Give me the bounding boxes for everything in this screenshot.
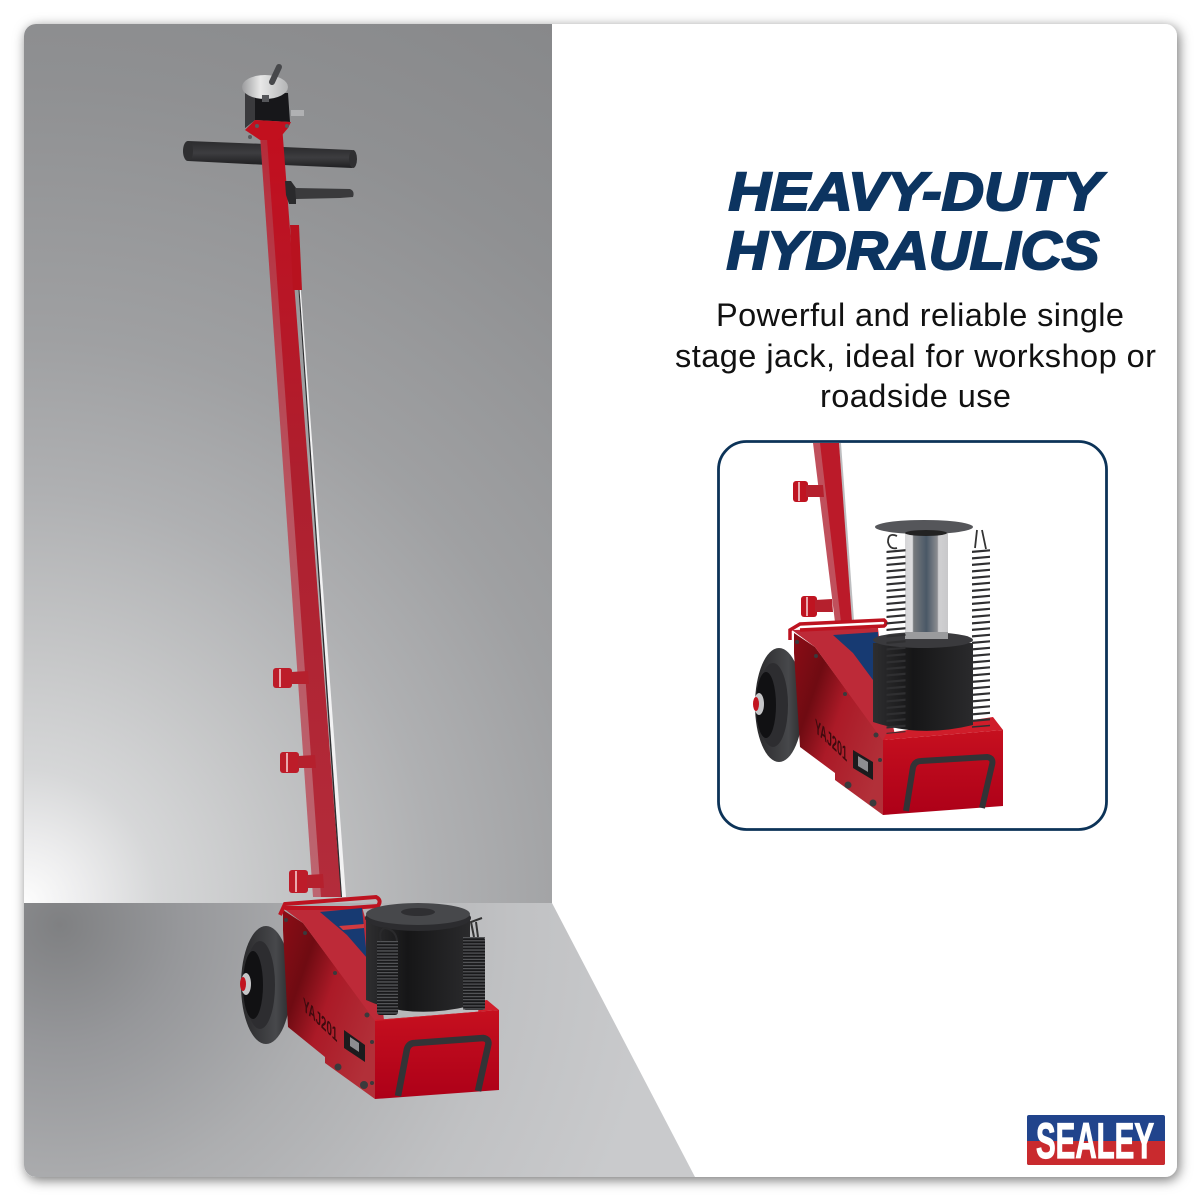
wheel	[240, 926, 291, 1044]
illustration: main trolley jack with handle	[183, 67, 499, 1099]
warning label	[320, 908, 367, 958]
inset rivets	[795, 640, 882, 806]
red clamp bar on pole	[290, 225, 302, 290]
floor	[24, 903, 695, 1177]
base front	[375, 1000, 499, 1099]
title: HEAVY-DUTY	[728, 162, 1107, 222]
rivets	[284, 918, 374, 1089]
inset left spring	[886, 550, 906, 733]
inset pole	[813, 443, 852, 622]
model marking: YAJ201	[303, 994, 338, 1048]
inset chrome rod	[839, 443, 854, 620]
inset chrome ram	[905, 533, 948, 632]
inset right spring	[972, 550, 990, 727]
pump dial	[242, 67, 304, 140]
description text: Powerful and reliable single	[716, 297, 1124, 333]
description text: stage jack, ideal for workshop or	[675, 338, 1156, 374]
storage clamps	[273, 668, 324, 893]
right spring	[463, 918, 485, 1010]
inset cylinder	[873, 632, 973, 731]
base top	[283, 907, 384, 1021]
panel: inset raised jack	[718, 442, 1106, 830]
inset base front	[883, 717, 1003, 815]
inset clamps	[793, 481, 833, 617]
left spring	[377, 928, 398, 1015]
wall	[24, 24, 552, 904]
inset wheel	[753, 648, 803, 762]
inset top plate	[875, 520, 986, 549]
description text: roadside use	[820, 378, 1011, 414]
T-bar grips	[183, 141, 357, 168]
inset brand plate	[853, 750, 873, 780]
inset tow loop	[790, 620, 886, 640]
inset label	[833, 632, 878, 680]
chrome rod	[294, 225, 346, 897]
brand plate	[344, 1030, 365, 1062]
inset frame	[718, 442, 1106, 830]
release lever	[285, 181, 354, 204]
title	[726, 162, 1107, 281]
panel: grey studio backdrop	[24, 24, 695, 1177]
cylinder	[365, 903, 471, 1012]
description text	[675, 297, 1156, 414]
inset model marking: YAJ201	[815, 715, 847, 767]
inset base side	[794, 633, 883, 815]
inset base top	[792, 628, 895, 741]
handle pole	[260, 125, 341, 897]
tow loop	[280, 897, 380, 915]
title: HYDRAULICS	[726, 221, 1100, 281]
inset jack	[753, 443, 1003, 815]
base side panel	[283, 910, 375, 1099]
